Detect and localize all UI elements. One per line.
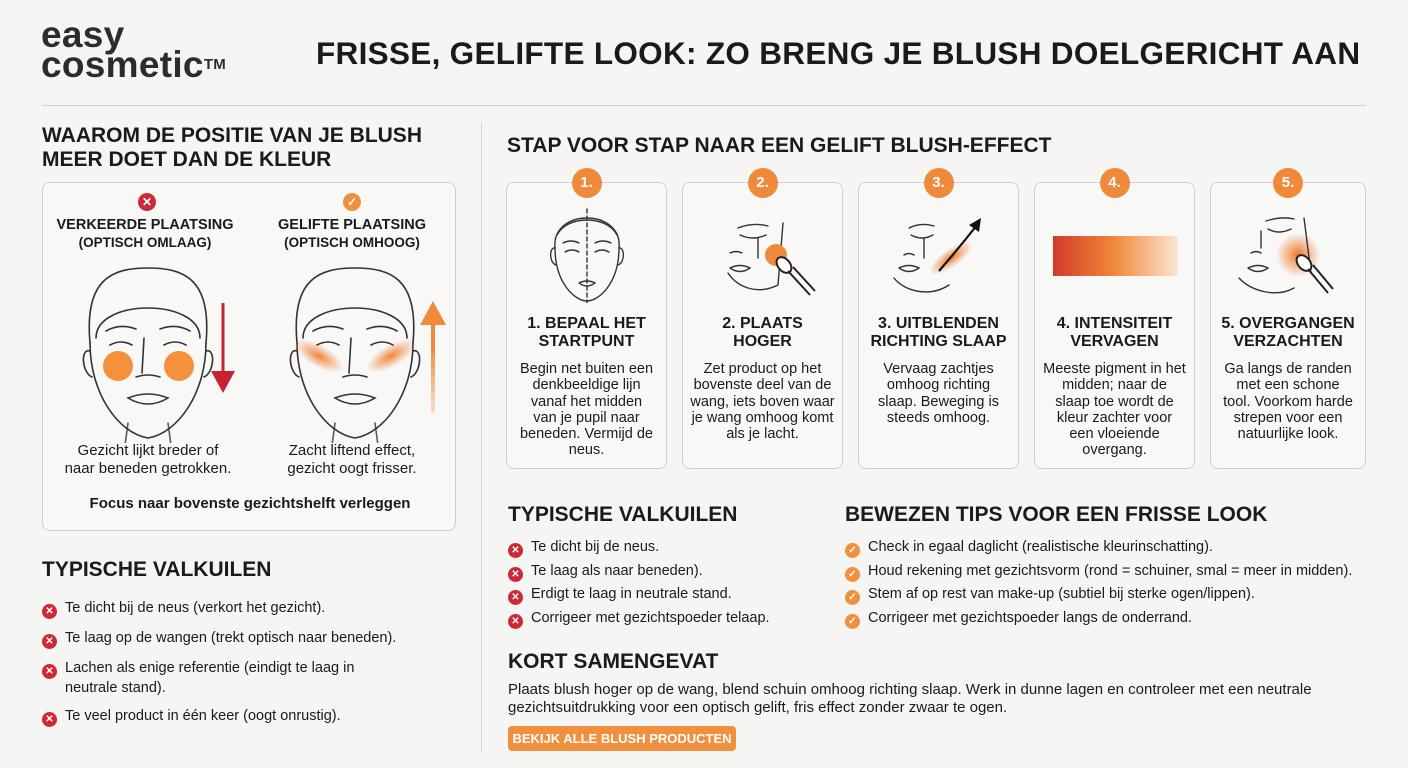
list: valkuilen left: Lachen als enige referentie (eindigt te laag in xyxy=(65,660,354,676)
logo: easy xyxy=(41,14,125,55)
heading: verkeerde plaatsing: VERKEERDE PLAATSING xyxy=(56,217,233,233)
list: valkuilen right: ✕ xyxy=(511,616,520,627)
arrow up xyxy=(431,321,435,413)
title: FRISSE, GELIFTE LOOK: ZO BRENG JE BLUSH DOELGERICHT AAN xyxy=(316,35,1360,71)
list: tips: ✓ xyxy=(848,592,857,603)
card 5: 5. OVERGANGEN xyxy=(1221,315,1355,332)
heading: kort samengevat: KORT SAMENGEVAT xyxy=(508,650,718,673)
heading: verkeerde plaatsing: (OPTISCH OMLAAG) xyxy=(79,235,211,250)
list: valkuilen right: ✕ xyxy=(511,569,520,580)
card 3: Vervaag zachtjes omhoog richting slaap. Beweging is steeds omhoog. xyxy=(878,361,999,426)
list: tips: ✓ xyxy=(848,545,857,556)
list: valkuilen right: ✕ xyxy=(511,545,520,556)
list: tips: ✓ xyxy=(848,569,857,580)
illustration: faces xyxy=(82,267,446,443)
heading: gelifte plaatsing: GELIFTE PLAATSING xyxy=(278,217,426,233)
heading: stap voor stap: STAP VOOR STAP NAAR EEN GELIFT BLUSH-EFFECT xyxy=(507,134,1051,157)
card 5: Ga langs de randen met een schone tool. Voorkom harde strepen voor een natuurlijke look. xyxy=(1223,361,1353,442)
heading: gelifte plaatsing: (OPTISCH OMHOOG) xyxy=(284,235,420,250)
focus text: Focus naar bovenste gezichtshelft verleggen xyxy=(90,495,410,512)
card 3: RICHTING SLAAP xyxy=(870,333,1006,350)
heading: bewezen tips: BEWEZEN TIPS VOOR EEN FRISSE LOOK xyxy=(845,503,1267,526)
card 1 xyxy=(506,182,667,469)
button: BEKIJK ALLE BLUSH PRODUCTEN xyxy=(512,731,732,746)
card 4: Meeste pigment in het midden; naar de slaap toe wordt de kleur zachter voor een vloeiende overgang. xyxy=(1043,361,1186,458)
card 2: HOGER xyxy=(733,333,792,350)
list: valkuilen left: Te dicht bij de neus (verkort het gezicht). xyxy=(65,600,325,616)
panel: comparison xyxy=(42,182,456,531)
caption wrong: Gezicht lijkt breder of xyxy=(78,442,218,459)
logo xyxy=(41,14,226,85)
card 4: 4. INTENSITEIT xyxy=(1057,315,1172,332)
arrow down xyxy=(222,303,224,375)
card 1: 1. BEPAAL HET xyxy=(527,315,646,332)
caption wrong xyxy=(65,442,231,477)
list: tips xyxy=(845,539,1352,629)
card 2: Zet product op het bovenste deel van de wang, iets boven waar je wang omhoog komt als je lacht. xyxy=(690,361,835,442)
card 2 xyxy=(682,182,843,469)
card 3: 3. xyxy=(932,174,945,191)
card 5 xyxy=(1210,182,1366,469)
summary text: Plaats blush hoger op de wang, blend schuin omhoog richting slaap. Werk in dunne lagen en controleer met een neutrale gezichtsuitdrukking voor een optisch gelift, fris effect zonder zwaar te ogen. xyxy=(508,681,1312,716)
heading: typische valkuilen right: TYPISCHE VALKUILEN xyxy=(508,503,737,526)
list: valkuilen left: ✕ xyxy=(45,666,54,677)
caption wrong: naar beneden getrokken. xyxy=(65,460,231,477)
icon: correct xyxy=(343,193,361,211)
heading: typische valkuilen left: TYPISCHE VALKUILEN xyxy=(42,558,271,581)
icon: face with arrow xyxy=(893,218,981,293)
logo: cosmeticTM xyxy=(41,44,226,85)
card 1: STARTPUNT xyxy=(539,333,634,350)
caption correct xyxy=(287,442,417,477)
card 2: 2. xyxy=(756,174,769,191)
icon: face with brush xyxy=(727,222,816,296)
card 4: 4. xyxy=(1108,174,1121,191)
card 3: 3. UITBLENDEN xyxy=(878,315,999,332)
icon: wrong xyxy=(138,193,156,211)
list: valkuilen right xyxy=(508,539,770,629)
caption correct: Zacht liftend effect, xyxy=(289,442,415,459)
heading: waarom positie xyxy=(42,124,422,171)
list: valkuilen left: neutrale stand). xyxy=(65,680,166,696)
icon: wrong: ✕ xyxy=(142,195,152,209)
card 4 xyxy=(1034,182,1195,469)
list: tips: Check in egaal daglicht (realistische kleurinschatting). xyxy=(868,539,1213,555)
card 4: VERVAGEN xyxy=(1070,333,1159,350)
card 3 xyxy=(858,182,1019,469)
list: tips: Stem af op rest van make-up (subtiel bij sterke ogen/lippen). xyxy=(868,586,1255,602)
heading: waarom positie: WAAROM DE POSITIE VAN JE BLUSH xyxy=(42,124,422,147)
card 2: 2. PLAATS xyxy=(722,315,803,332)
icon: face with brush soft xyxy=(1238,217,1334,294)
list: valkuilen right: Te dicht bij de neus. xyxy=(531,539,659,555)
heading: gelifte plaatsing xyxy=(278,217,426,250)
list: tips: Corrigeer met gezichtspoeder langs de onderrand. xyxy=(868,610,1192,626)
button xyxy=(508,726,736,751)
list: valkuilen left: ✕ xyxy=(45,606,54,617)
list: valkuilen left: Te laag op de wangen (trekt optisch naar beneden). xyxy=(65,630,396,646)
caption correct: gezicht oogt frisser. xyxy=(287,460,417,477)
list: valkuilen left xyxy=(42,600,396,727)
list: valkuilen left: ✕ xyxy=(45,714,54,725)
card 5: VERZACHTEN xyxy=(1233,333,1343,350)
card 1: Begin net buiten een denkbeeldige lijn vanaf het midden van je pupil naar beneden. Vermijd de neus. xyxy=(520,361,653,458)
card 1: 1. xyxy=(580,174,593,191)
list: valkuilen left: ✕ xyxy=(45,636,54,647)
card 5: 5. xyxy=(1282,174,1294,191)
list: valkuilen right: ✕ xyxy=(511,592,520,603)
icon: face with line xyxy=(550,208,624,303)
list: tips: ✓ xyxy=(848,616,857,627)
list: valkuilen right: Corrigeer met gezichtspoeder telaap. xyxy=(531,610,770,626)
heading: waarom positie: MEER DOET DAN DE KLEUR xyxy=(42,148,331,171)
list: valkuilen left: Te veel product in één keer (oogt onrustig). xyxy=(65,708,341,724)
list: tips: Houd rekening met gezichtsvorm (rond = schuiner, smal = meer in midden). xyxy=(868,563,1352,579)
gradient bar xyxy=(1053,236,1178,276)
list: valkuilen right: Erdigt te laag in neutrale stand. xyxy=(531,586,732,602)
heading: verkeerde plaatsing xyxy=(56,217,233,250)
icon: correct: ✓ xyxy=(347,195,357,209)
list: valkuilen right: Te laag als naar beneden). xyxy=(531,563,703,579)
